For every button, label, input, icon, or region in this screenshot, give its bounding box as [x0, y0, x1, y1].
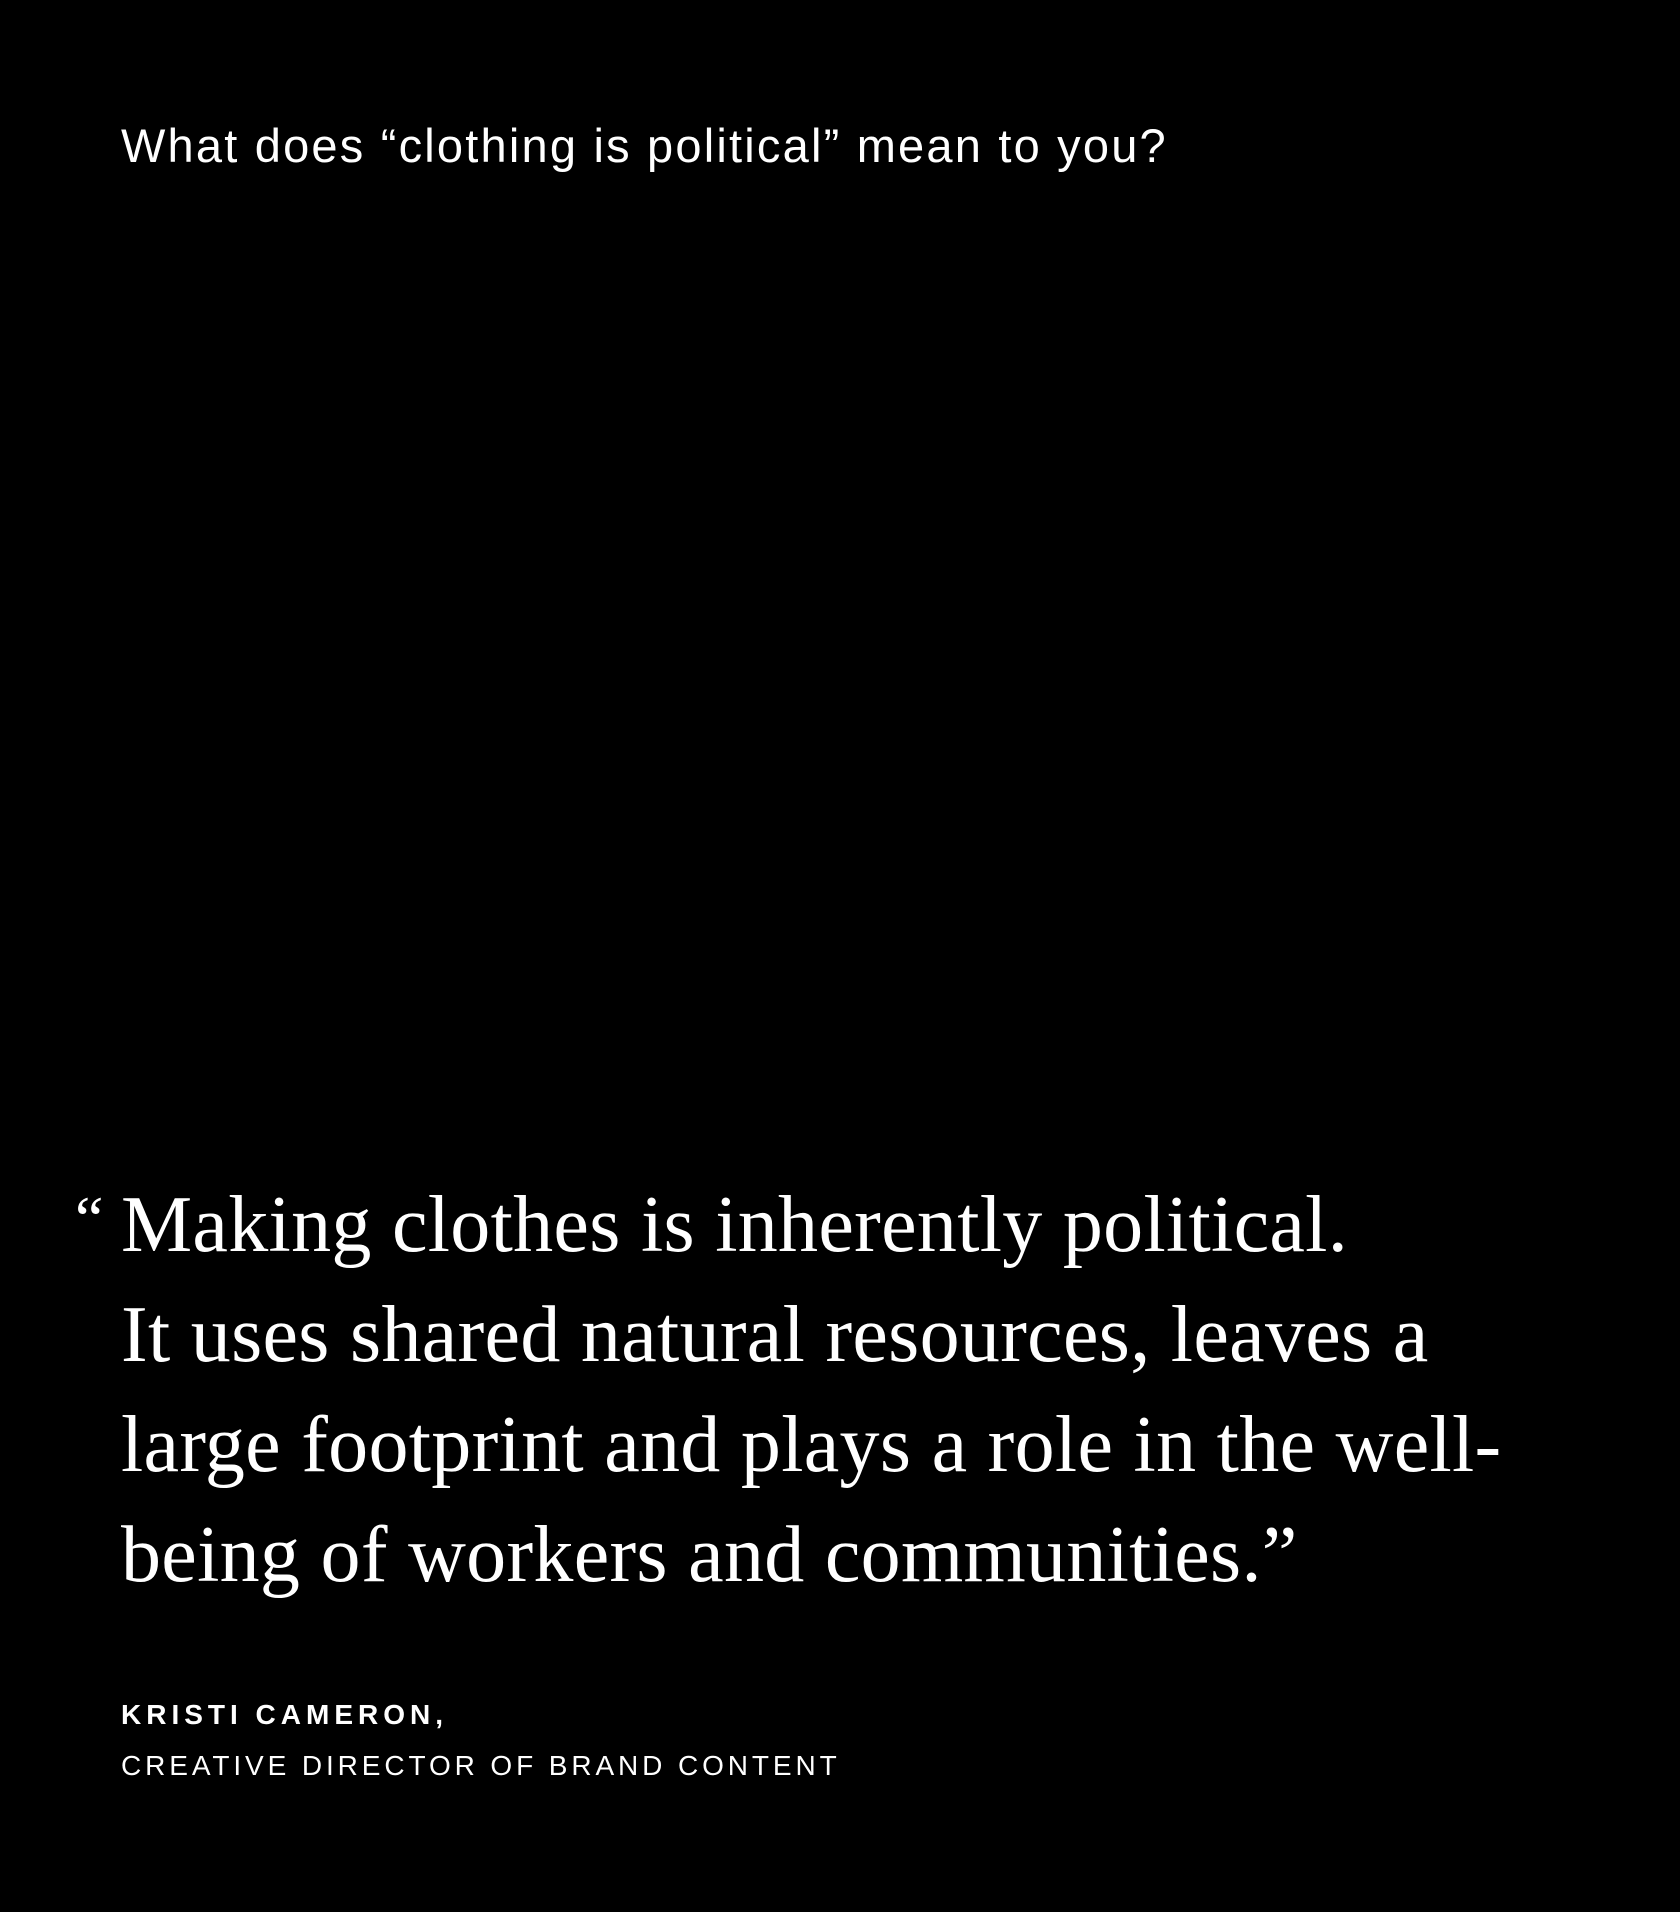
heading: question: What does “clothing is political” mean to you? — [121, 119, 1168, 172]
author role: CREATIVE DIRECTOR OF BRAND CONTENT — [121, 1750, 841, 1781]
quote text block: It uses shared natural resources, leaves a — [121, 1291, 1429, 1379]
quote text block: being of workers and communities.” — [121, 1511, 1298, 1599]
quote text block: Making clothes is inherently political. — [121, 1181, 1348, 1269]
quote text block: large footprint and plays a role in the well- — [121, 1401, 1502, 1489]
opening quote mark: “ — [75, 1183, 104, 1254]
attribution — [121, 1699, 841, 1781]
author name: KRISTI CAMERON, — [121, 1699, 448, 1730]
quote text block — [75, 1181, 1502, 1599]
